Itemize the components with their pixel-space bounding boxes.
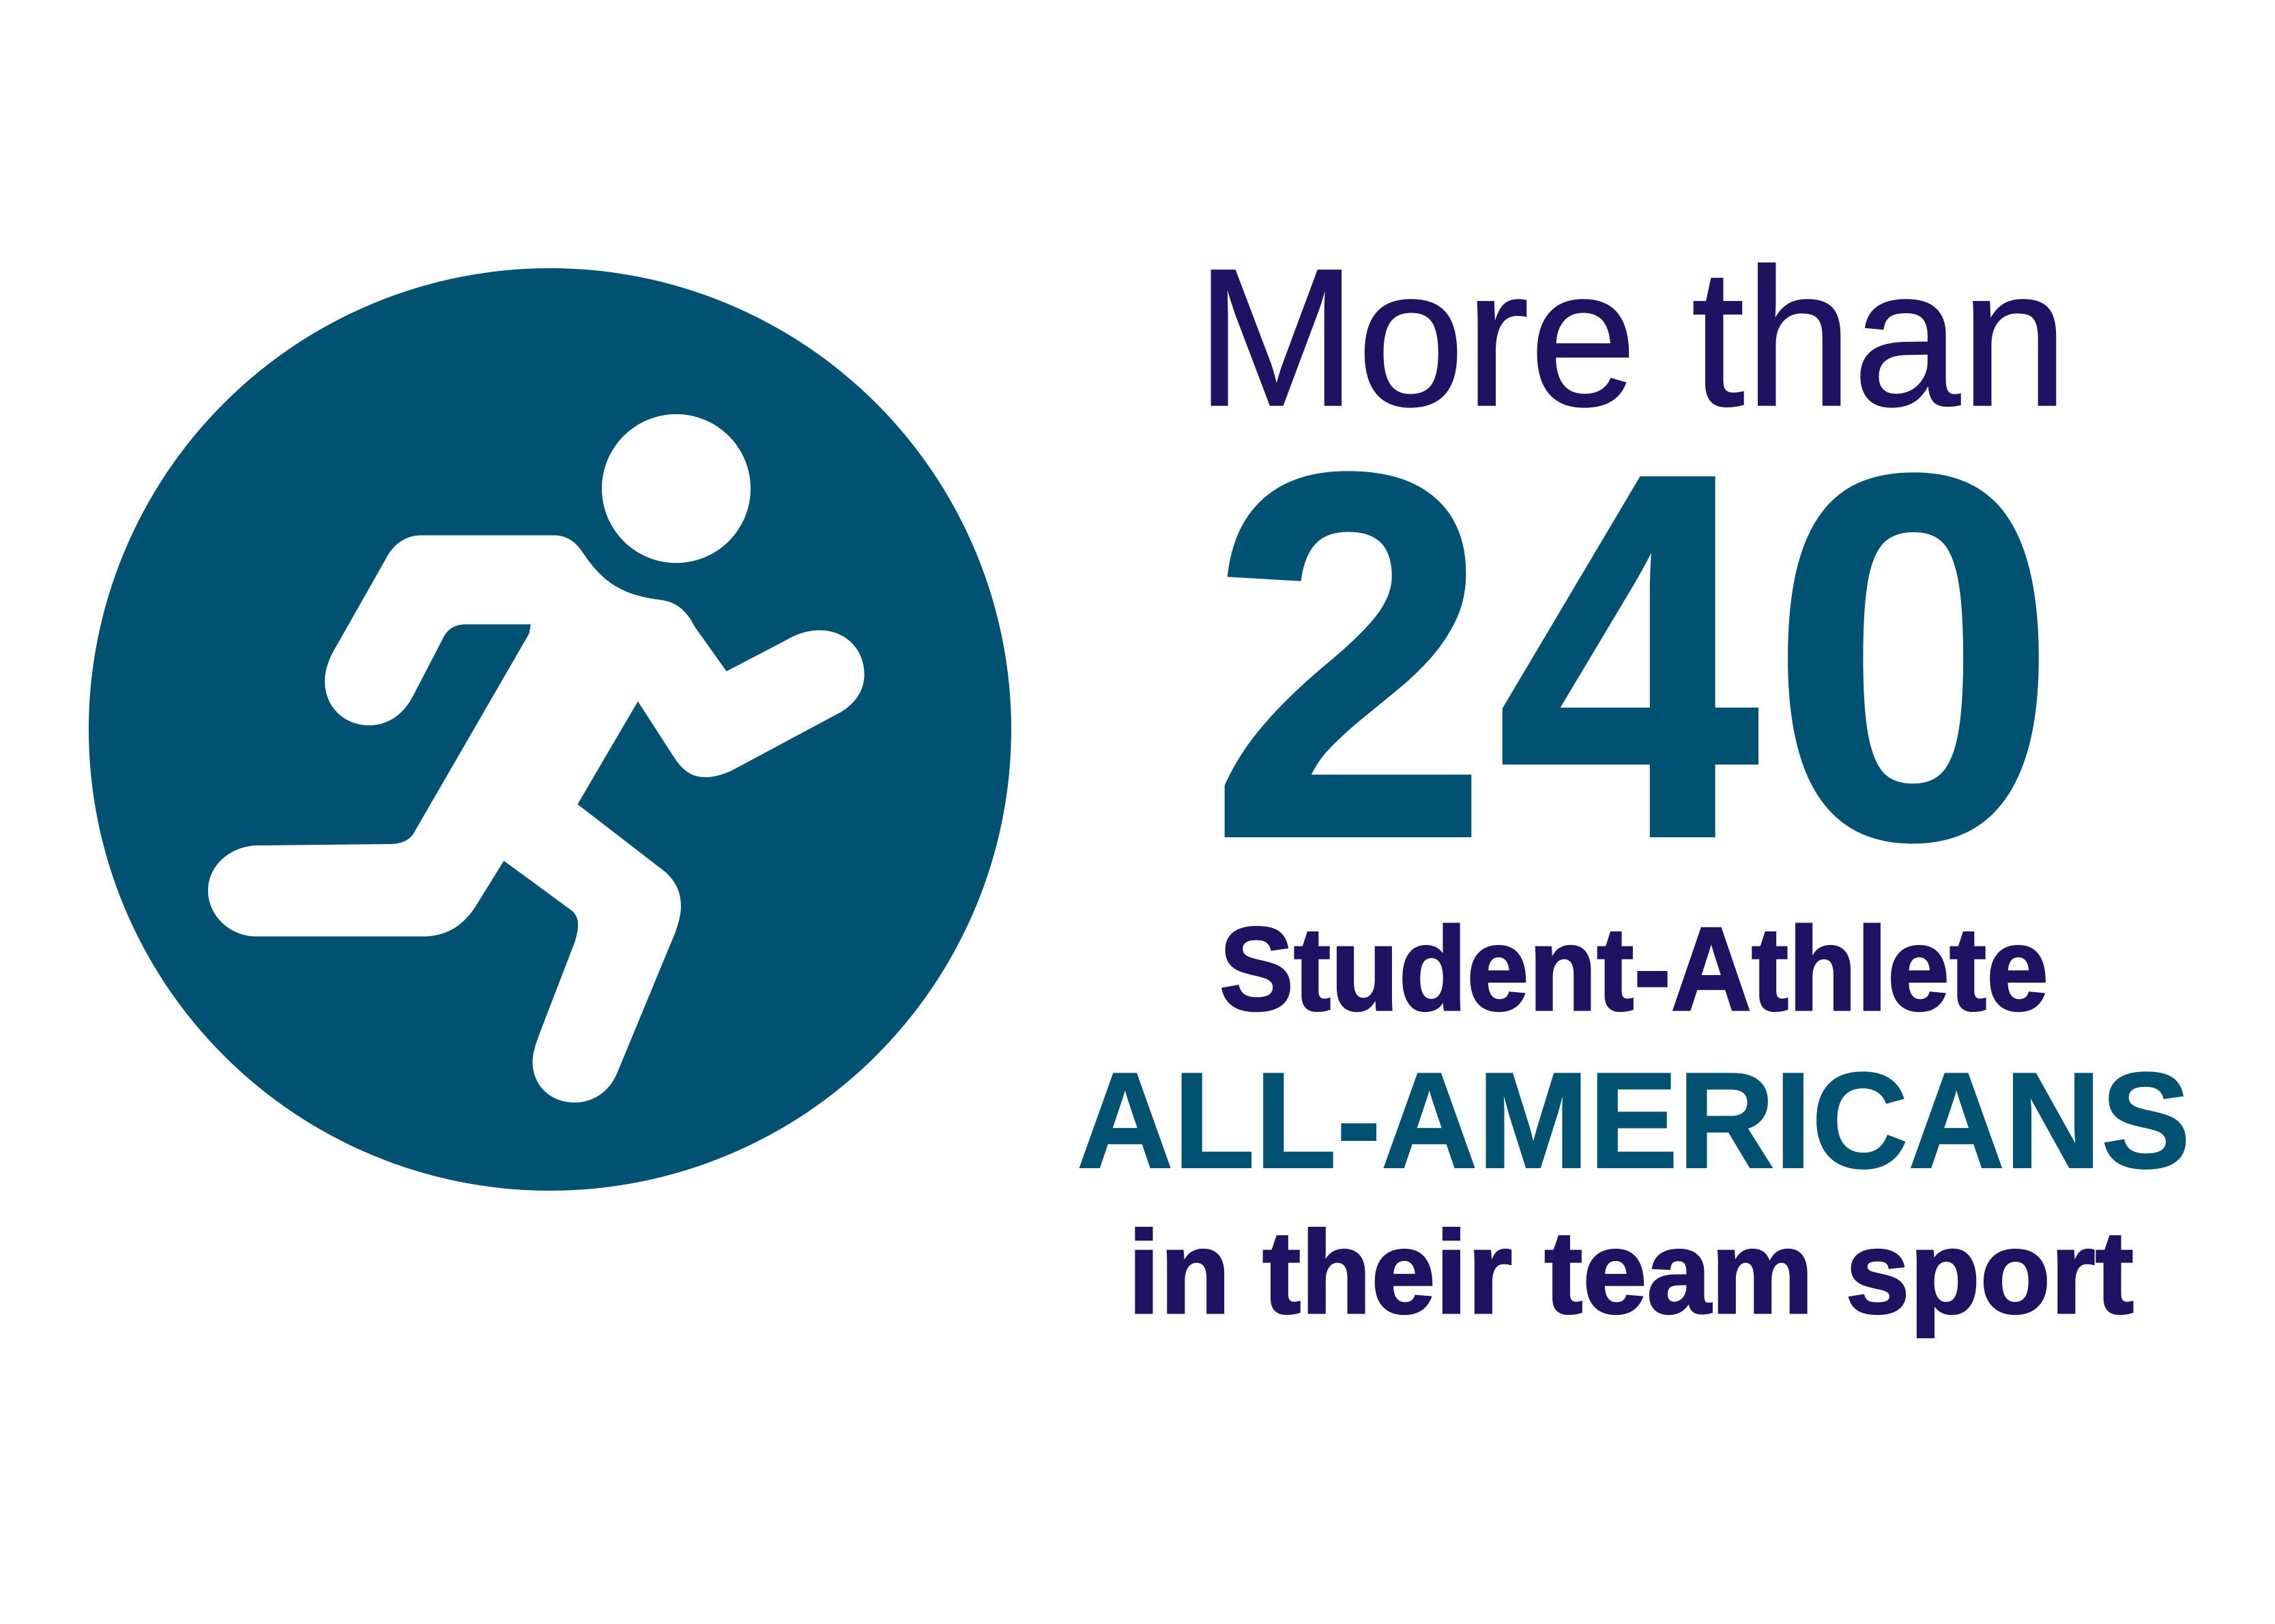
icon background circle xyxy=(89,268,1011,1191)
big number: 240: 0 xyxy=(1769,368,2058,947)
text: ALL-AMERICANS: ALL-AMERICANS xyxy=(1077,1045,2190,1197)
big number: 240 xyxy=(1209,366,2058,947)
runner head xyxy=(602,414,751,563)
runner body xyxy=(208,535,865,1103)
big number: 240: 4 xyxy=(1497,366,1762,946)
icon: running athlete in circle xyxy=(89,268,1011,1191)
text: Student-Athlete: Student-Athlete xyxy=(1219,902,2048,1035)
text: in their team sport: in their team sport xyxy=(1128,1207,2134,1338)
big number: 240: 2 xyxy=(1209,366,1490,946)
text: More than: More than xyxy=(1196,228,2068,448)
